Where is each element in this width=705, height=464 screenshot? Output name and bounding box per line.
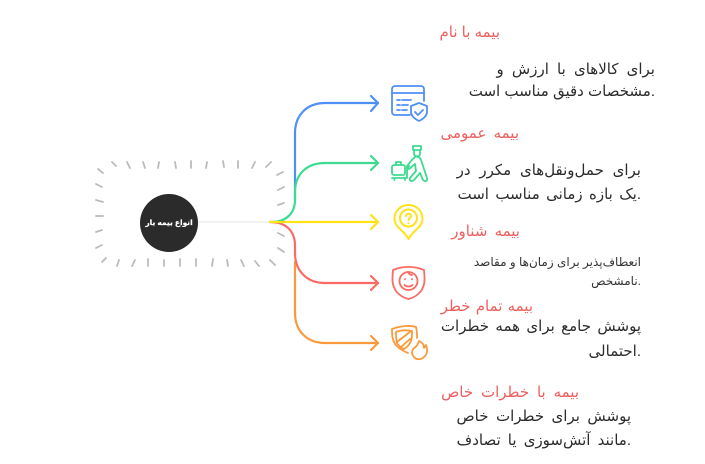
text: floating insurance: نامشخص. — [591, 274, 641, 288]
text: floating insurance: بیمه شناور — [451, 223, 520, 240]
text: specific-risk insurance: پوشش برای خطرات خاص — [456, 408, 631, 425]
radial tick ring — [96, 161, 284, 266]
text: specific-risk insurance: بیمه با خطرات خاص — [441, 384, 579, 401]
text: general insurance — [440, 125, 641, 203]
central dark circle — [140, 194, 198, 252]
icon: porter with luggage — [392, 146, 427, 181]
icon: shield with flame — [392, 326, 427, 359]
text: insurance by name — [439, 24, 655, 100]
connector: yellow arrow — [270, 215, 378, 229]
text: all-risk insurance — [440, 298, 641, 360]
connector: red arrow — [270, 222, 378, 290]
icon: document with shield — [392, 86, 427, 121]
connector: stem — [198, 221, 272, 223]
text: all-risk insurance: بیمه تمام خطر — [441, 298, 533, 315]
text: all-risk insurance: احتمالی. — [589, 343, 641, 360]
connector: blue arrow — [295, 96, 378, 200]
connector: green arrow — [272, 156, 378, 222]
text: specific-risk insurance: مانند آتش‌سوزی یا تصادف. — [457, 432, 631, 449]
text: specific-risk insurance — [441, 384, 631, 449]
connector: orange arrow — [295, 262, 378, 350]
text: insurance by name: برای کالاهای با ارزش و — [497, 61, 655, 78]
text: floating insurance — [450, 223, 641, 288]
central dark circle: انواع بیمه بار — [145, 218, 193, 227]
text: general insurance: برای حمل‌ونقل‌های مکرر در — [457, 162, 641, 179]
text: general insurance: بیمه عمومی — [440, 125, 519, 142]
text: insurance by name: مشخصات دقیق مناسب است. — [469, 83, 655, 100]
icon: question pin — [394, 205, 422, 239]
text: general insurance: یک بازه زمانی مناسب است. — [457, 186, 641, 203]
text: insurance by name: بیمه با نام — [439, 24, 500, 41]
icon: shield with face — [392, 267, 425, 299]
text: all-risk insurance: پوشش جامع برای همه خطرات — [441, 318, 641, 335]
text: floating insurance: انعطاف‌پذیر برای زمان‌ها و مقاصد — [474, 255, 641, 269]
